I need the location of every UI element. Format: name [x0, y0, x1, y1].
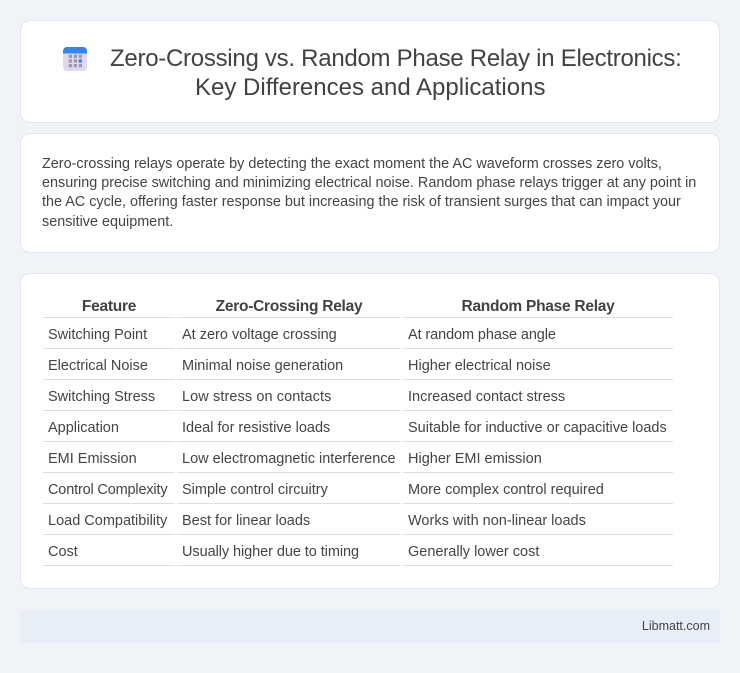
- row: Works with non-linear loads: [408, 513, 586, 529]
- icon: calendar: [63, 47, 87, 71]
- row: Low electromagnetic interference: [182, 451, 396, 467]
- panel: comparison table: [20, 273, 720, 589]
- row: Load Compatibility: [48, 513, 167, 529]
- row: [43, 451, 673, 473]
- row: More complex control required: [408, 482, 604, 498]
- row: [43, 482, 673, 504]
- row: EMI Emission: [48, 451, 137, 467]
- footer text: site name: Libmatt.com: [642, 619, 710, 633]
- row: [43, 544, 673, 566]
- row: [43, 389, 673, 411]
- row: Suitable for inductive or capacitive loads: [408, 420, 667, 436]
- footer: [20, 610, 720, 643]
- row: Cost: [48, 544, 78, 560]
- title: [110, 45, 682, 101]
- table header: Random Phase Relay: [462, 298, 614, 315]
- panel: intro text: [20, 133, 720, 253]
- row: Increased contact stress: [408, 389, 565, 405]
- row: Control Complexity: [48, 482, 167, 498]
- row: Higher electrical noise: [408, 358, 551, 374]
- table: [43, 298, 673, 566]
- title: Zero-Crossing vs. Random Phase Relay in Electronics:: [110, 45, 682, 72]
- intro text block: sensitive equipment.: [42, 214, 173, 230]
- intro text block: Zero-crossing relays operate by detecting the exact moment the AC waveform crosses zero volts,: [42, 156, 662, 172]
- row: Application: [48, 420, 119, 436]
- row: Switching Point: [48, 327, 147, 343]
- row: Switching Stress: [48, 389, 155, 405]
- row: Usually higher due to timing: [182, 544, 359, 560]
- row: [43, 420, 673, 442]
- row: At zero voltage crossing: [182, 327, 337, 343]
- row: [43, 513, 673, 535]
- row: Best for linear loads: [182, 513, 310, 529]
- row: Low stress on contacts: [182, 389, 331, 405]
- row: Electrical Noise: [48, 358, 148, 374]
- title: Key Differences and Applications: [195, 74, 545, 101]
- row: [43, 327, 673, 349]
- intro text block: ensuring precise switching and minimizing electrical noise. Random phase relays trigger at any point in: [42, 175, 696, 191]
- table header: Feature: [82, 298, 136, 315]
- table header: Zero-Crossing Relay: [216, 298, 362, 315]
- intro text block: [42, 156, 696, 230]
- row: Ideal for resistive loads: [182, 420, 330, 436]
- table header: [43, 298, 673, 318]
- row: At random phase angle: [408, 327, 556, 343]
- intro text block: the AC cycle, offering faster response but increasing the risk of transient surges that can impact your: [42, 194, 681, 210]
- row: Minimal noise generation: [182, 358, 343, 374]
- row: [43, 358, 673, 380]
- row: Generally lower cost: [408, 544, 539, 560]
- row: Higher EMI emission: [408, 451, 542, 467]
- row: Simple control circuitry: [182, 482, 328, 498]
- panel: title card: [20, 20, 720, 123]
